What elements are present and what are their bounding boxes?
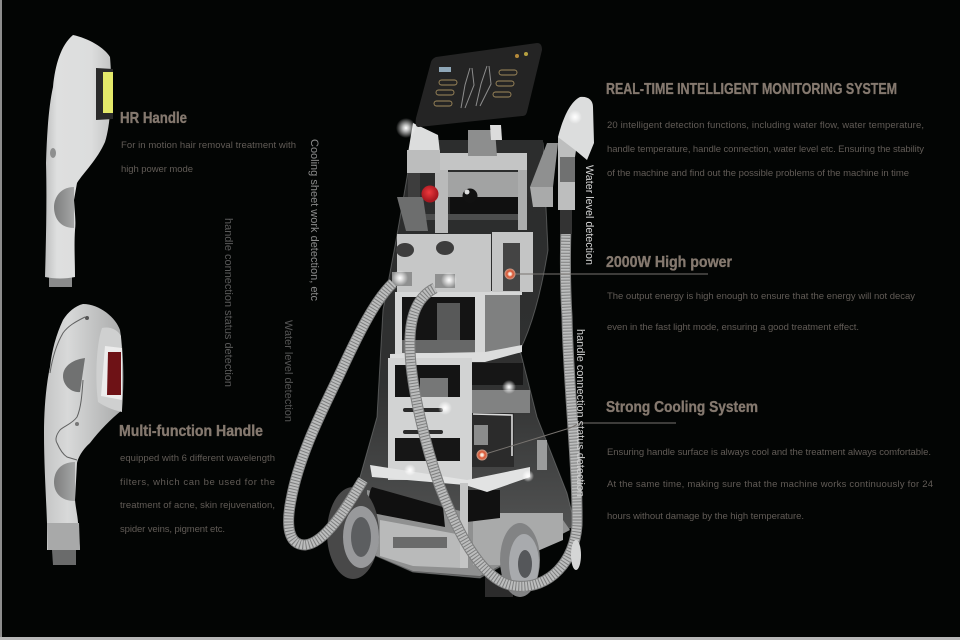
vertical label: water level right: Water level detection <box>583 165 595 265</box>
black knob <box>462 188 478 204</box>
vertical label: handle connection right: handle connection status detection <box>574 329 586 497</box>
highlights <box>392 110 582 482</box>
text: monitoring description: handle temperature, handle connection, water level etc. Ensuring the stability <box>607 144 924 155</box>
text: multi-function handle description: filters, which can be used for the <box>120 477 275 488</box>
right wheel <box>485 523 540 597</box>
lower base <box>367 490 570 576</box>
left handle holder <box>407 123 440 197</box>
icon: HR handle <box>45 35 113 287</box>
interior frame 2 <box>388 358 547 480</box>
red emergency button <box>422 186 438 202</box>
text: HR handle description: For in motion hair removal treatment with <box>121 140 296 151</box>
heading: Multi-function Handle: Multi-function Handle <box>119 423 263 440</box>
text: HR handle description: high power mode <box>121 164 193 175</box>
text: high power description: even in the fast light mode, ensuring a good treatment effect. <box>607 322 859 333</box>
hose: left <box>289 283 393 545</box>
hose: right <box>410 225 581 586</box>
upper interior frame 1 <box>395 291 522 357</box>
text: cooling description <box>607 447 933 522</box>
text: multi-function handle description <box>120 453 275 535</box>
text: monitoring description: 20 intelligent detection functions, including water flow, water temperature, <box>607 120 924 131</box>
leader line: cooling <box>476 423 676 460</box>
text: high power description: The output energy is high enough to ensure that the energy will not decay <box>607 291 915 302</box>
text: high power description <box>607 291 915 333</box>
text: cooling description: At the same time, making sure that the machine works continuously for 24 <box>607 479 933 490</box>
vertical label: water level left: Water level detection <box>282 320 294 422</box>
text: cooling description: Ensuring handle surface is always cool and the treatment always comfortable. <box>607 447 931 458</box>
text: HR handle description <box>121 140 296 175</box>
machine <box>289 43 594 597</box>
vertical label: cooling sheet: Cooling sheet work detection, etc <box>308 139 320 301</box>
right handle on holder <box>558 97 594 234</box>
leader line: 2000W <box>504 268 708 280</box>
text: monitoring description: of the machine and find out the possible problems of the machine in time <box>607 168 909 179</box>
touch screen <box>416 43 542 127</box>
water panel block <box>392 232 533 292</box>
lower shelf <box>370 465 530 492</box>
text: cooling description: hours without damage by the high temperature. <box>607 511 804 522</box>
dark base panel <box>369 487 445 527</box>
heading: HR Handle: HR Handle <box>120 110 187 127</box>
machine body shell <box>340 143 575 578</box>
text: multi-function handle description: equipped with 6 different wavelength <box>120 453 275 464</box>
heading: 2000W high power: 2000W High power <box>606 254 732 271</box>
icon: Multi-function handle <box>44 304 123 565</box>
shelf <box>390 345 522 362</box>
left wheel <box>327 487 379 579</box>
text: multi-function handle description: treatment of acne, skin rejuvenation, <box>120 500 275 511</box>
upper frame <box>397 125 558 233</box>
text: monitoring description <box>607 120 924 179</box>
heading: strong cooling system: Strong Cooling System <box>606 399 758 416</box>
text: multi-function handle description: spider veins, pigment etc. <box>120 524 225 535</box>
vertical label: handle connection left: handle connection status detection <box>222 218 234 387</box>
